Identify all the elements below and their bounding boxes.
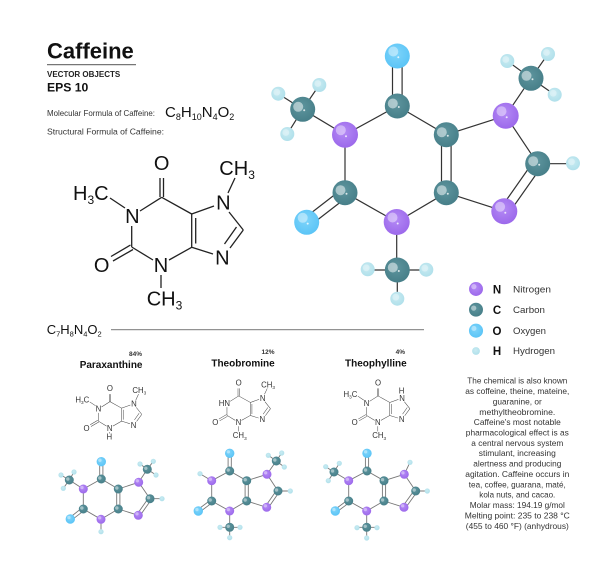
paraxanthine structural formula: O (107, 384, 113, 393)
description text block: pharmacological effect is as (466, 428, 569, 438)
paraxanthine structural formula (75, 384, 147, 441)
theophylline structural formula: 3 (383, 436, 386, 441)
structural formula of caffeine: C (94, 183, 109, 205)
paraxanthine structural formula: N (96, 405, 101, 414)
theobromine structural formula: O (236, 378, 242, 387)
structural formula of caffeine: CH (147, 289, 176, 311)
theobromine structural formula: HN (219, 399, 230, 408)
description text block: guaranine, or (493, 396, 542, 406)
molecular formula: 4 (213, 112, 218, 122)
description text block: tea, coffee, guarana, maté, (469, 479, 566, 489)
theophylline structural formula: O (352, 418, 358, 427)
structural formula of caffeine: O (94, 255, 109, 277)
legend (469, 282, 555, 358)
paraxanthine structural formula: N (131, 421, 136, 430)
molecular formula: 8 (176, 112, 181, 122)
theophylline 3D model (323, 449, 430, 541)
theobromine structural formula: 3 (272, 385, 275, 390)
metabolite formula: C (47, 322, 56, 337)
theophylline structural formula: CH (372, 431, 383, 440)
theobromine heading (211, 349, 275, 370)
legend: N (493, 284, 501, 296)
theophylline structural formula: 3 (349, 395, 352, 400)
structural formula of caffeine: O (154, 153, 169, 175)
description text block: methyltheobromine. (479, 407, 555, 417)
structural formula of caffeine (73, 153, 255, 313)
paraxanthine heading: Paraxanthine (80, 360, 143, 371)
legend: Nitrogen (513, 284, 551, 295)
theophylline structural formula: N (375, 418, 381, 427)
paraxanthine heading: 84% (129, 351, 142, 358)
description text block: Melting point: 235 to 238 °C (465, 510, 570, 520)
structural formula of caffeine: N (216, 193, 231, 215)
description text block: Molar mass: 194.19 g/mol (470, 500, 565, 510)
large 3D caffeine molecule (271, 44, 580, 306)
theobromine heading: 12% (261, 349, 275, 356)
molecular formula: C (165, 104, 176, 121)
theophylline structural formula: O (375, 378, 381, 387)
structural formula label: Structural Formula of Caffeine: (47, 126, 164, 136)
theophylline structural formula: H (343, 390, 349, 399)
description text block: The chemical is also known (467, 376, 567, 386)
legend: C (493, 305, 501, 317)
structural formula of caffeine: CH (219, 158, 248, 180)
molecular formula: H (181, 104, 192, 121)
paraxanthine heading (80, 351, 143, 371)
description text block: (455 to 460 °F) (anhydrous) (466, 521, 569, 531)
structural formula of caffeine: 3 (176, 299, 183, 313)
theophylline structural formula: H (399, 387, 404, 396)
subtitle: EPS 10: EPS 10 (47, 80, 89, 94)
paraxanthine structural formula: H (106, 432, 112, 441)
legend: Carbon (513, 305, 545, 316)
structural formula of caffeine: 3 (248, 168, 255, 182)
paraxanthine structural formula: CH (132, 386, 144, 395)
paraxanthine structural formula: 3 (81, 400, 84, 405)
theobromine structural formula: CH (233, 431, 244, 440)
molecular formula: 10 (192, 112, 202, 122)
theophylline structural formula: N (364, 399, 369, 408)
theobromine structural formula: N (236, 418, 241, 427)
theobromine structural formula: O (212, 418, 218, 427)
molecular formula: O (218, 104, 229, 121)
theophylline heading: Theophylline (345, 359, 407, 370)
section divider (111, 329, 424, 330)
description text block: Caffeine's most notable (474, 417, 561, 427)
theobromine structural formula: 3 (244, 436, 247, 441)
metabolite formula: 7 (56, 330, 60, 338)
molecular formula: 2 (229, 112, 234, 122)
legend: O (493, 326, 502, 338)
paraxanthine structural formula: N (131, 399, 137, 408)
structural formula of caffeine: 3 (87, 193, 94, 207)
description text block: as coffeine, theine, mateine, (465, 386, 569, 396)
structural formula of caffeine: H (73, 183, 87, 205)
subtitle: vector objects: VECTOR OBJECTS (47, 70, 121, 79)
structural formula of caffeine: N (154, 255, 168, 277)
theophylline structural formula: N (399, 415, 405, 424)
theobromine structural formula: N (260, 394, 266, 403)
title: Caffeine (47, 38, 134, 63)
theobromine 3D model (194, 449, 293, 540)
metabolite formula: 8 (70, 330, 74, 338)
structural formula of caffeine: N (125, 206, 140, 228)
paraxanthine structural formula: N (107, 424, 113, 433)
legend: Oxygen (513, 326, 546, 337)
metabolite formula: O (87, 322, 98, 337)
paraxanthine structural formula: H (75, 396, 81, 405)
description text block: a central nervous system (471, 438, 563, 448)
description text block: kola nuts, and cacao. (479, 490, 555, 500)
theobromine structural formula: CH (261, 380, 272, 389)
paraxanthine structural formula: O (84, 424, 90, 433)
title underline (47, 64, 136, 65)
theophylline heading: 4% (396, 349, 405, 356)
metabolite formula: N (74, 322, 83, 337)
theophylline structural formula (343, 378, 410, 441)
description text block: stimulant, increasing (479, 448, 556, 458)
theophylline heading (345, 349, 407, 370)
atoms of large molecule (271, 44, 580, 306)
theobromine structural formula (212, 378, 275, 441)
molecular formula label: Molecular Formula of Caffeine: (47, 108, 155, 118)
metabolite formula: 2 (98, 330, 102, 338)
description text block (465, 376, 570, 531)
theobromine structural formula: N (259, 415, 265, 424)
description text block: agitation. Caffeine occurs in (465, 469, 569, 479)
theobromine heading: Theobromine (211, 359, 275, 370)
legend: Hydrogen (513, 346, 555, 357)
metabolite formula: H (60, 322, 70, 337)
molecular formula: N (202, 104, 213, 121)
description text block: alertness and producing (473, 459, 561, 469)
paraxanthine 3D model (58, 457, 165, 534)
paraxanthine structural formula: C (84, 396, 90, 405)
structural formula of caffeine: N (215, 248, 230, 270)
legend: H (493, 346, 501, 358)
paraxanthine structural formula: 3 (144, 391, 147, 396)
metabolite formula: 4 (83, 330, 87, 338)
theophylline structural formula: N (399, 394, 405, 403)
theophylline structural formula: C (352, 390, 358, 399)
